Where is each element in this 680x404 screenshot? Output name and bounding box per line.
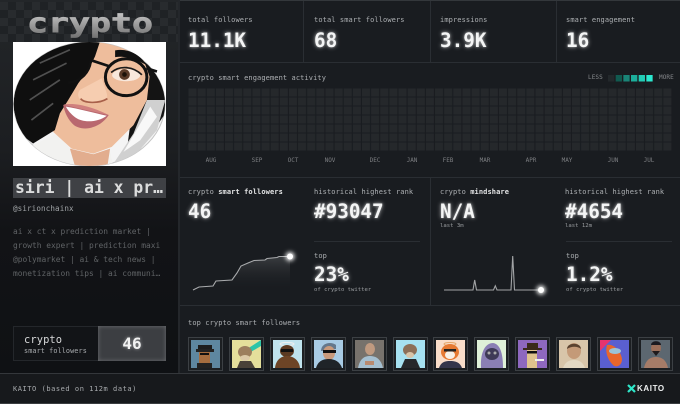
checker pattern header with title: crypto [27,8,153,39]
heading: crypto smart engagement activity [188,74,326,82]
top label: top [566,252,579,260]
legend swatches [608,75,653,82]
label: crypto smart followers [188,188,283,196]
avatar 8: hooded figure [474,338,508,370]
profile portrait illustration [13,42,166,166]
heatmap grid [188,88,672,150]
avatar 6: ape on light blue [394,338,428,370]
bio text: growth expert | prediction maxi [13,241,160,250]
legend [588,74,674,82]
month labels: MAY [562,157,572,164]
top caption: of crypto twitter [314,287,371,293]
label: total smart followers [314,16,405,24]
avatar 4: man with cap and sunglasses [312,338,346,370]
value: 16 [566,29,589,52]
panel: engagement activity heatmap [188,74,674,164]
badge value [98,326,166,361]
bio text: monetization tips | ai communi… [13,269,160,278]
month labels: DEC [370,157,380,164]
rank caption: last 12m [565,223,592,229]
value: 68 [314,29,337,52]
value: 3.9K [440,29,486,52]
month labels: MAR [480,157,490,164]
avatar 3: brown ape with halo [270,338,304,370]
value: 46 [188,200,211,223]
top percent: 23% [314,263,349,286]
stat: total smart followers [312,16,405,52]
avatar 10: man portrait [556,338,590,370]
month labels: JUL [644,157,654,164]
handle: @sirionchainx [13,204,74,213]
panel: top crypto smart followers [188,319,673,371]
top percent: 1.2% [566,263,612,286]
month labels [206,157,654,164]
avatar 5: man seated grey background [352,338,386,370]
avatar row [188,337,673,371]
badge value: 46 [122,334,142,353]
footer source note: KAITO (based on 112m data) [13,385,137,393]
bio text: ai x ct x prediction market | [13,227,151,236]
smart followers badge [13,326,166,361]
rank label: historical highest rank [314,188,413,196]
panel: smart followers [186,188,420,293]
label: smart engagement [566,16,635,24]
month labels: NOV [325,157,335,164]
avatar 12: man with beard [638,338,672,370]
display name: siri | ai x pr… [15,178,163,197]
label: impressions [440,16,487,24]
value: 11.1K [188,29,246,52]
month labels: JUN [608,157,618,164]
avatar 7: orange dog with halo [434,338,468,370]
panel: profile sidebar [0,0,180,373]
line chart: mindshare [444,256,549,298]
badge sublabel: smart followers [24,347,87,355]
panel: mindshare [438,188,672,298]
month labels: OCT [288,157,298,164]
badge label: crypto [24,334,62,346]
rank value: #93047 [314,200,384,223]
top label: top [314,252,327,260]
rank label: historical highest rank [565,188,664,196]
bio text: @polymarket | ai & tech news | [13,255,156,264]
line chart: smart followers [192,249,298,290]
stat: impressions [439,16,488,52]
top caption: of crypto twitter [566,287,623,293]
month labels: JAN [407,157,417,164]
avatar 11: orange creature with blue glasses [598,338,632,370]
caption: last 3m [440,223,464,229]
legend less: LESS [588,74,603,81]
avatar 2: ape on yellow [230,338,264,370]
month labels: AUG [206,157,216,164]
month labels: APR [526,157,536,164]
bio text [13,227,160,278]
rank value: #4654 [565,200,623,223]
label: total followers [188,16,253,24]
display name bar [13,178,166,198]
logo wordmark: KAITO [637,384,665,393]
value: N/A [440,200,475,223]
heading: top crypto smart followers [188,319,300,327]
panel: footer [0,373,680,404]
logo mark [627,384,636,393]
month labels: FEB [443,157,453,164]
label: crypto mindshare [440,188,509,196]
legend more: MORE [659,74,674,81]
stat: total followers [188,16,253,52]
avatar 9: pixel punk on purple [516,338,550,370]
month labels: SEP [252,157,262,164]
stat: smart engagement [566,16,635,52]
avatar 1: pixel punk with cap [188,338,222,370]
KAITO logo [627,384,665,393]
